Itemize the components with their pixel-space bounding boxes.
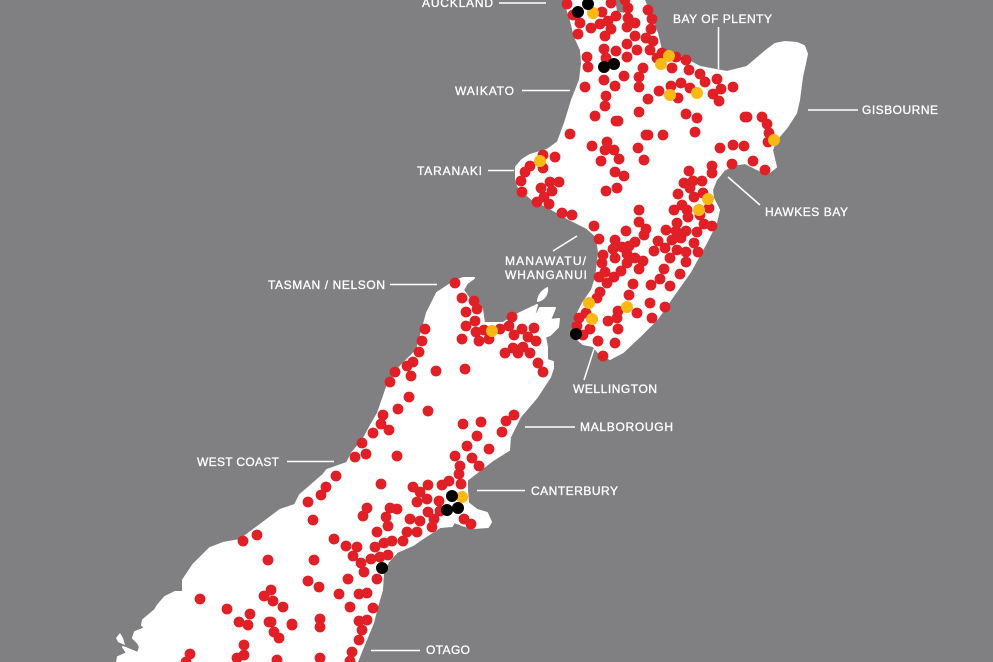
southern islet: [116, 633, 125, 645]
label: Bay of Plenty: BAY OF PLENTY: [673, 12, 772, 26]
label: Hawkes Bay: HAWKES BAY: [765, 205, 848, 219]
label: Waikato: [455, 84, 570, 98]
label: Canterbury: CANTERBURY: [531, 484, 618, 498]
label: Tasman / Nelson: TASMAN / NELSON: [268, 278, 385, 292]
label: Wellington: [573, 349, 657, 396]
label: Otago: OTAGO: [426, 643, 470, 657]
label: Taranaki: [417, 164, 514, 178]
label: Taranaki: TARANAKI: [417, 164, 482, 178]
harbour notch: [615, 0, 627, 13]
label: Gisbourne: [808, 103, 938, 117]
south island landmass: [117, 278, 559, 662]
label: Manawatu / Whanganui: [505, 236, 587, 282]
region labels: [197, 0, 938, 657]
kapiti island: [537, 287, 548, 302]
label: Gisbourne: GISBOURNE: [862, 103, 938, 117]
label: Auckland: [422, 0, 546, 10]
label: Bay of Plenty: [673, 12, 772, 69]
label: Hawkes Bay: [728, 177, 848, 219]
red markers: south island: [186, 283, 543, 662]
label: West Coast: WEST COAST: [197, 455, 280, 469]
red markers: north island: [521, 0, 769, 356]
label: Otago: [371, 643, 470, 657]
black markers: [382, 4, 614, 568]
label: West Coast: [197, 455, 334, 469]
label: Manawatu / Whanganui: MANAWATU/: [505, 254, 587, 268]
label: Waikato: WAIKATO: [455, 84, 514, 98]
yellow markers: [462, 13, 774, 497]
label: Malborough: MALBOROUGH: [580, 420, 673, 434]
label: Wellington: WELLINGTON: [573, 382, 657, 396]
north island landmass: [516, 0, 807, 359]
label: Manawatu / Whanganui: WHANGANUI: [505, 268, 587, 282]
